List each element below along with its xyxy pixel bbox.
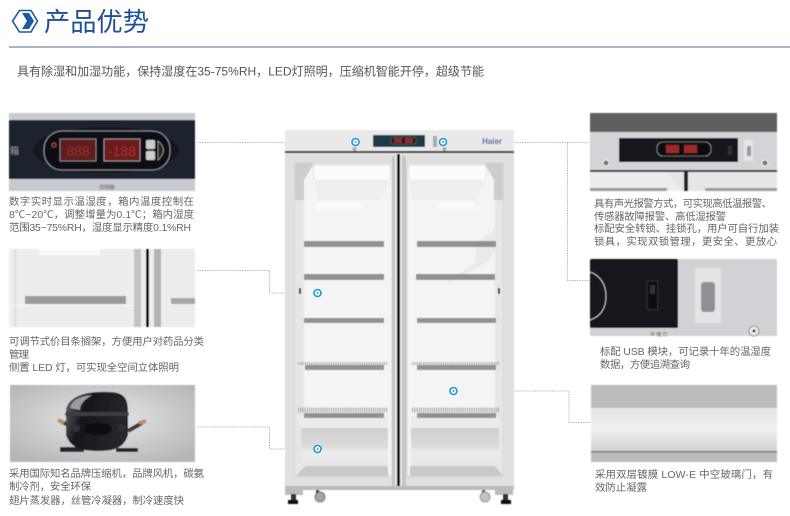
panel: USB module: 中 继 灯 — [650, 331, 668, 338]
text: USB module: 标配 USB 模块，可记录十年的温湿度 — [600, 345, 771, 358]
controller — [33, 127, 179, 173]
text: adjustable shelf: 管理 — [9, 348, 30, 361]
controller: -188 — [108, 143, 136, 159]
panel: glass door — [591, 385, 777, 462]
panel: compressor — [10, 385, 195, 462]
panel: temperature display: 箱 — [10, 145, 19, 156]
text: glass door: 效防止凝露 — [595, 481, 648, 494]
panel: temperature display: 控制器 — [99, 184, 115, 191]
feet and wheels — [285, 487, 513, 504]
text: glass door: 采用双层镀膜 LOW-E 中空玻璃门，有 — [595, 468, 773, 481]
control display — [373, 135, 425, 147]
text: glass door — [595, 468, 773, 494]
text: compressor: 制冷剂，安全环保 — [9, 480, 92, 493]
text: alarm — [594, 197, 779, 248]
text: alarm: 锁具，实现双锁管理，更安全、更放心 — [594, 235, 778, 248]
panel: USB module — [590, 259, 777, 338]
subtitle text: 具有除湿和加湿功能，保持湿度在35-75%RH，LED灯照明，压缩机智能开停，超级节能 — [17, 64, 484, 78]
text: compressor: 采用国际知名品牌压缩机，品牌风机，碳氨 — [9, 467, 205, 480]
text: alarm: 具有声光报警方式，可实现高低温报警、 — [594, 197, 772, 210]
wire racks — [298, 364, 500, 410]
door seam — [392, 154, 406, 487]
text: alarm: 标配安全转锁、挂锁孔，用户可自行加装 — [594, 222, 779, 235]
controller: 888 — [66, 143, 90, 159]
text: USB module — [600, 345, 771, 371]
text: adjustable shelf — [9, 335, 204, 374]
leader lines — [197, 142, 591, 449]
hotspots — [314, 138, 457, 452]
text: temperature display: 范围35~75%RH，湿度显示精度0.1%RH — [9, 221, 191, 234]
panel: alarm — [590, 113, 777, 191]
text: temperature display: 数字实时显示温湿度，箱内温度控制在 — [9, 195, 194, 208]
logo: Haier — [482, 136, 503, 146]
title — [9, 7, 790, 48]
text: temperature display: 8℃~20℃，调整增量为0.1℃；箱内湿度 — [9, 208, 194, 221]
panel: temperature display — [9, 113, 195, 191]
door right — [407, 163, 503, 476]
freezer cabinet — [285, 130, 514, 504]
text: adjustable shelf: 可调节式价目条搁架，方便用户对药品分类 — [9, 335, 204, 348]
text: compressor: 翅片蒸发器，丝管冷凝器，制冷速度快 — [9, 494, 185, 507]
text: compressor — [9, 467, 205, 507]
text: USB module: 数据，方便追溯查询 — [600, 358, 690, 371]
icon: chevron hexagon — [12, 10, 38, 32]
text: alarm: 传感器故障报警、高低湿报警 — [594, 210, 726, 223]
door left — [295, 163, 392, 476]
cabinet body — [285, 130, 514, 504]
heading: 产品优势 — [44, 7, 149, 37]
text: adjustable shelf: 侧置 LED 灯，可实现全空间立体照明 — [9, 361, 179, 374]
icon: compressor — [58, 392, 146, 452]
text: temperature display — [9, 195, 194, 234]
panel: adjustable shelf — [9, 249, 195, 327]
shelves — [304, 241, 496, 418]
